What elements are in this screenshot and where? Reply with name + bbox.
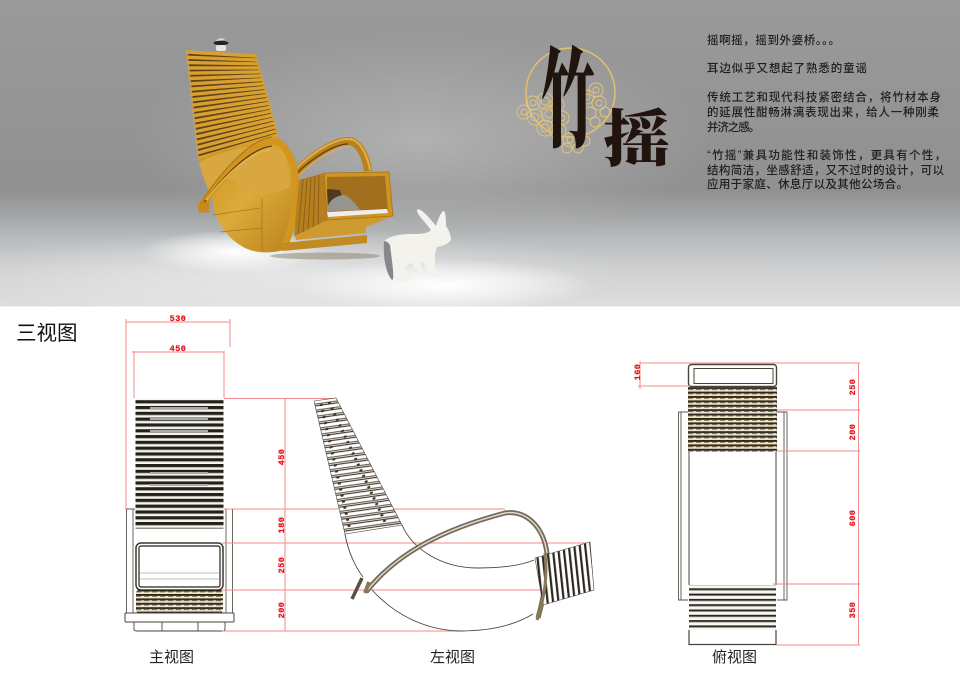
- window box: [136, 543, 223, 590]
- footrest under panel: [295, 216, 393, 240]
- side rails: [678, 412, 787, 600]
- intro paragraphs: 摇啊摇，摇到外婆桥。。。: [707, 33, 840, 47]
- intro paragraphs: 并济之感。: [707, 120, 760, 134]
- dimension lines: front and side: [126, 314, 594, 631]
- plank seams: [213, 198, 262, 250]
- white rabbit: [384, 209, 451, 281]
- base board: [282, 235, 367, 251]
- small animal in box: [327, 195, 360, 211]
- far armrest: [295, 139, 370, 177]
- near armrest: [199, 137, 296, 248]
- seat curves: [345, 525, 534, 631]
- dimension lines: top view: 250: [848, 379, 858, 395]
- gold circle: [526, 48, 615, 137]
- intro paragraphs: “竹摇”兼具功能性和装饰性，更具有个性，: [707, 148, 946, 162]
- white cushion: [327, 209, 388, 217]
- character 摇: 摇: [603, 91, 670, 179]
- dimension lines: front and side: 450: [277, 449, 287, 465]
- concave seat surface: [199, 146, 290, 197]
- side frame: [126, 509, 232, 613]
- dimension lines: front and side: 530: [170, 314, 186, 324]
- back slats: [688, 386, 777, 452]
- caption: top view: 俯视图: [712, 649, 757, 666]
- floor shadow: [270, 252, 380, 260]
- heading: 三视图: 三视图: [16, 322, 78, 345]
- seat shell: [199, 140, 296, 252]
- back slats: [314, 398, 402, 534]
- caption: front view: 主视图: [149, 649, 194, 666]
- top frame: [688, 364, 776, 386]
- intro paragraphs: 结构简洁，坐感舒适，又不过时的设计，可以: [707, 163, 944, 177]
- intro paragraphs: 耳边似乎又想起了熟悉的童谣: [707, 61, 867, 75]
- background photo band: [0, 0, 960, 320]
- rocking chair render: [187, 52, 393, 260]
- intro paragraphs: 应用于家庭、休息厅以及其他公场合。: [707, 177, 908, 191]
- dimension lines: top view: 160: [633, 364, 643, 380]
- intro paragraphs: 传统工艺和现代科技紧密结合，将竹材本身: [707, 90, 941, 104]
- top view drawing: [678, 364, 787, 644]
- left side view drawing: [314, 398, 594, 631]
- dimension lines: front and side: 450: [170, 344, 186, 354]
- character 竹: 竹: [541, 14, 595, 170]
- logo: 竹摇: [517, 14, 670, 179]
- top slats grey infill: [150, 408, 208, 485]
- gold clouds: [517, 83, 610, 153]
- rocker foot: [352, 578, 362, 599]
- slat end ticks: [321, 402, 386, 530]
- dimension lines: front and side: 180: [277, 517, 287, 533]
- chair back slats: [187, 52, 277, 158]
- intro paragraphs: [707, 33, 946, 191]
- dimension lines: front and side: 200: [277, 602, 287, 618]
- dimension lines: top view: [633, 361, 860, 645]
- figure on chair top: [214, 38, 228, 51]
- caption: left view: 左视图: [430, 649, 475, 666]
- back slats: [136, 398, 224, 528]
- front view drawing: [125, 398, 234, 631]
- footrest side slats: [294, 173, 327, 236]
- dimension lines: top view: 350: [848, 602, 858, 618]
- armrest bundle: [366, 513, 547, 618]
- footrest box frame: [324, 172, 393, 220]
- dimension lines: front and side: 250: [277, 557, 287, 573]
- foot edge: [689, 630, 776, 644]
- footrest slats: [535, 542, 594, 605]
- lower slats: [689, 585, 776, 630]
- lower slats: [136, 590, 223, 613]
- intro paragraphs: 的延展性酣畅淋漓表现出来，给人一种刚柔: [707, 105, 940, 119]
- base: [125, 613, 234, 622]
- dimension lines: top view: 200: [848, 424, 858, 440]
- dimension lines: top view: 600: [848, 510, 858, 526]
- arm foot: [198, 200, 211, 213]
- footrest box opening: [327, 176, 388, 216]
- seat outline: [689, 452, 776, 585]
